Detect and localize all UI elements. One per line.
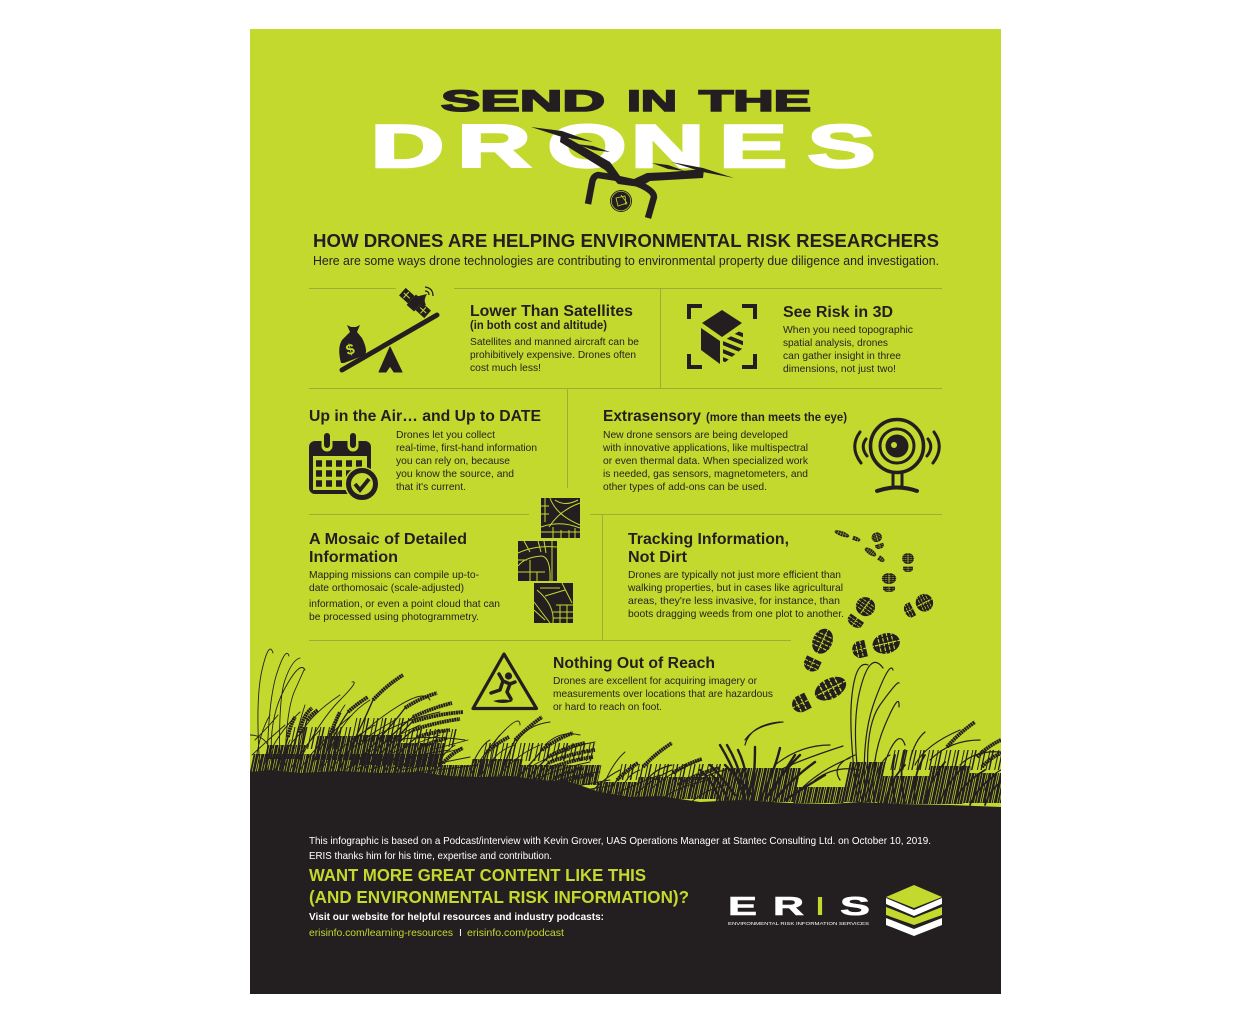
footer links: I [459,927,462,939]
body text: you know the source, and [396,468,514,480]
footer links [309,927,564,939]
logo wordmark [728,893,870,921]
icon: map tiles [518,498,580,623]
heading: Information [309,549,398,566]
body text: walking properties, but in cases like agricultural [627,582,843,594]
body text: New drone sensors are being developed [603,429,788,441]
body text: be processed using photogrammetry. [309,611,479,623]
subheading: (more than meets the eye) [706,412,847,424]
icon: hazard sign [473,654,536,708]
body text [396,429,537,493]
body text [783,324,913,375]
body text [470,336,639,374]
logo tagline: ENVIRONMENTAL RISK INFORMATION SERVICES [728,921,869,927]
footer call to action heading: WANT MORE GREAT CONTENT LIKE THIS [309,865,646,885]
body text: that it's current. [396,481,466,493]
ground silhouette [250,770,1001,994]
body text [553,675,773,713]
footer credit text: ERIS thanks him for his time, expertise and contribution. [309,850,552,862]
heading: Extrasensory [603,408,701,425]
body text: date orthomosaic (scale-adjusted) [309,582,464,594]
heading: Lower Than Satellites [470,303,633,320]
panel: see risk in 3D [689,304,913,375]
panel: extrasensory [602,408,939,493]
body text: Mapping missions can compile up-to- [309,569,479,581]
body text: can gather insight in three [783,350,901,362]
body text: or even thermal data. When specialized work [603,455,809,467]
body text: Drones are excellent for acquiring imagery or [553,675,757,687]
heading [628,531,789,566]
grass silhouette [245,649,1019,994]
title: send in the: THE [699,85,811,118]
heading: Tracking Information, [628,531,789,548]
footer call to action heading: (AND ENVIRONMENTAL RISK INFORMATION)? [309,887,689,907]
body text [602,429,809,493]
panel: lower than satellites [339,286,639,374]
body text [627,569,844,620]
body text: you can rely on, because [396,455,510,467]
icon: webcam sensor [855,420,939,491]
body text: spatial analysis, drones [783,337,888,349]
intro text: Here are some ways drone technologies are contributing to environmental property due diligence and investigation. [313,253,939,268]
icon: seesaw with satellite and money bag: $ [344,340,357,359]
body text: boots dragging weeds from one plot to another. [628,608,844,620]
body text: cost much less! [470,362,541,374]
icon: drone [531,127,734,218]
body text: Satellites and manned aircraft can be [470,336,639,348]
footer links: erisinfo.com/learning-resources [309,927,453,939]
heading: Not Dirt [628,549,688,566]
logo wordmark: I [816,893,824,921]
heading: See Risk in 3D [783,304,893,321]
heading: Nothing Out of Reach [553,655,715,672]
footer call to action heading [309,865,689,907]
body text: with innovative applications, like multispectral [602,442,808,454]
logo wordmark: E [728,893,757,921]
title: drones: DRONES [371,113,876,180]
body text: is needed, gas sensors, magnetometers, and [603,468,808,480]
body text: Drones are typically not just more efficient than [628,569,841,581]
heading: Up in the Air… and Up to DATE [309,408,541,425]
panel: up in the air [309,408,541,502]
icon: seesaw with satellite and money bag [339,286,437,372]
body text: real-time, first-hand information [396,442,537,454]
body text: prohibitively expensive. Drones often [470,349,636,361]
body text: or hard to reach on foot. [553,701,662,713]
panel: mosaic [309,498,580,623]
ERIS logo [728,885,942,936]
footer visit text: Visit our website for helpful resources and industry podcasts: [309,911,604,923]
body text: When you need topographic [783,324,913,336]
logo stacked layers icon [886,885,942,936]
title: send in the [441,85,811,118]
body text: dimensions, not just two! [783,363,896,375]
panel: nothing out of reach [473,654,773,713]
main heading: HOW DRONES ARE HELPING ENVIRONMENTAL RISK RESEARCHERS [313,230,939,251]
logo wordmark: S [840,893,870,921]
body text: measurements over locations that are hazardous [553,688,773,700]
subheading: (in both cost and altitude) [470,320,607,332]
body text [309,569,500,623]
icon: boot prints [784,528,937,719]
logo wordmark: R [773,893,804,921]
panel: tracking information [627,528,937,719]
body text: areas, they're less invasive, for instance, than [628,595,840,607]
icon: calendar with check [309,436,380,502]
heading [309,531,467,566]
heading: A Mosaic of Detailed [309,531,467,548]
title: send in the: SEND [441,85,605,118]
footer credit text: This infographic is based on a Podcast/interview with Kevin Grover, UAS Operations Manager at Stantec Consulting Ltd. on October 10, 2019. [309,835,931,847]
body text: information, or even a point cloud that can [309,598,500,610]
icon: 3D cube [689,306,755,368]
body text: other types of add-ons can be used. [603,481,767,493]
footer credit text [309,835,931,862]
title: send in the: IN [627,85,677,118]
panel: green poster background [250,29,1001,994]
footer links: erisinfo.com/podcast [467,927,564,939]
body text: Drones let you collect [396,429,495,441]
